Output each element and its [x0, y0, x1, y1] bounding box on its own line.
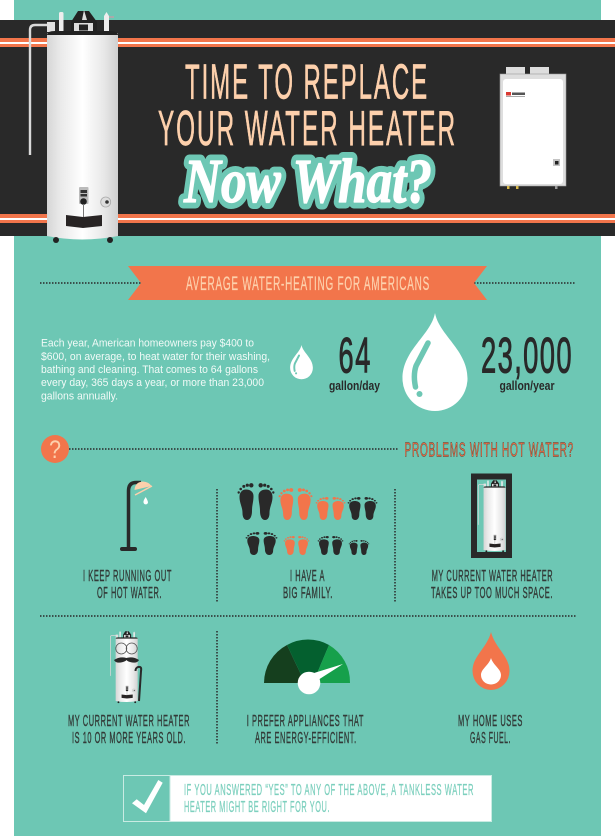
title: Now What? [183, 148, 432, 216]
problem: big family: BIG FAMILY. [283, 585, 333, 602]
callout: tankless recommendation: HEATER MIGHT BE RIGHT FOR YOU. [184, 799, 330, 816]
icon: shower [120, 482, 152, 551]
icon: small water drop [290, 345, 313, 379]
icon: heater in tight frame [474, 476, 509, 555]
problem: heater 10 or more years old [68, 631, 190, 747]
header banner [0, 20, 615, 236]
divider column 1 [216, 489, 218, 603]
problem: takes up too much space [431, 476, 553, 602]
problem: energy-efficient appliances: ARE ENERGY-EFFICIENT. [255, 730, 357, 747]
text: IS 10 OR MORE YEARS OLD. [72, 730, 186, 747]
problem: running out of hot water: OF HOT WATER. [97, 585, 162, 602]
title [158, 54, 457, 216]
icon: tankless water heater [500, 67, 566, 189]
stat: 23,000 gallon/year: gallon/year [500, 378, 554, 393]
icon: tank water heater [30, 10, 118, 243]
problem: running out of hot water [83, 482, 172, 602]
text: I KEEP RUNNING OUT [83, 568, 172, 585]
paragraph: cost of heating water: $600, on average, to heat water for their washing, [41, 351, 270, 363]
problem: home uses gas fuel: GAS FUEL. [470, 730, 511, 747]
paragraph: cost of heating water: bathing and cleaning. That comes to 64 gallons [41, 364, 258, 376]
paragraph: cost of heating water [41, 338, 270, 402]
paragraph: cost of heating water: gallons annually. [41, 390, 118, 402]
divider column 1 lower [216, 631, 218, 745]
problem: big family [238, 483, 377, 602]
icon: efficiency gauge [264, 640, 350, 694]
title: Now What? [183, 148, 432, 216]
icon: footprints [238, 483, 377, 555]
problem: energy-efficient appliances [247, 640, 364, 747]
paragraph: cost of heating water: Each year, American homeowners pay $400 to [41, 338, 254, 350]
icon: large water drop [402, 313, 468, 411]
icon: check mark box [124, 776, 170, 822]
stat: 64 gallon/day [329, 328, 381, 393]
divider column 2 [394, 489, 396, 603]
icon: question mark circle: ? [49, 436, 61, 464]
section ribbon: average water-heating [40, 266, 576, 300]
horizontal divider [40, 615, 576, 617]
stat: 64 gallon/day: 64 [338, 328, 372, 384]
text: MY CURRENT WATER HEATER [68, 713, 190, 730]
callout: tankless recommendation [124, 776, 492, 822]
icon: old heater with glasses, moustache and cane [110, 631, 141, 703]
icon: gas flame drop [472, 632, 510, 690]
stat: 64 gallon/day: gallon/day [329, 378, 381, 393]
text: I PREFER APPLIANCES THAT [247, 713, 364, 730]
problem: home uses gas fuel [458, 632, 523, 747]
problem: big family: I HAVE A [290, 568, 325, 585]
text: MY HOME USES [458, 713, 523, 730]
paragraph: cost of heating water: every day, 365 days a year, or more than 23,000 [41, 377, 264, 389]
icon: question mark circle [41, 435, 69, 464]
stat: 23,000 gallon/year [481, 328, 573, 393]
